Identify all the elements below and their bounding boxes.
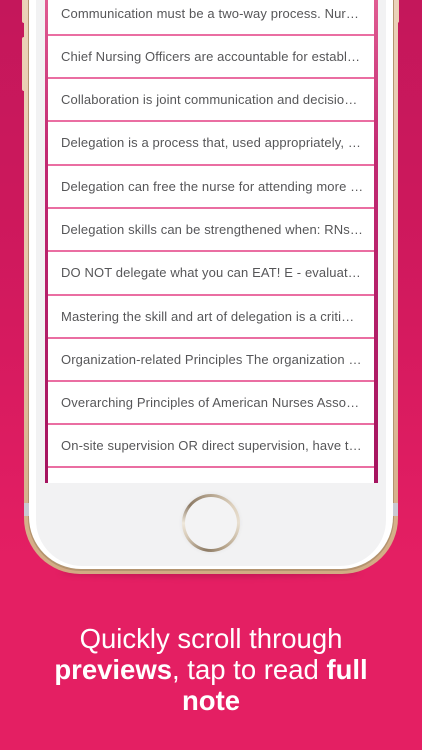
note row xyxy=(48,166,374,209)
home button face xyxy=(185,497,237,549)
home button xyxy=(182,494,240,552)
note row xyxy=(48,339,374,382)
screen xyxy=(45,0,378,483)
note row: Delegation can free the nurse for attending more … xyxy=(61,179,363,194)
note row: DO NOT delegate what you can EAT! E - evaluat… xyxy=(61,265,361,280)
phone shadow xyxy=(60,568,360,577)
note row: Delegation is a process that, used appropriately, … xyxy=(61,135,361,150)
note row xyxy=(48,252,374,296)
note list xyxy=(48,0,374,483)
note row xyxy=(48,36,374,79)
note row xyxy=(48,425,374,468)
note row xyxy=(48,0,374,36)
antenna band right xyxy=(393,503,398,516)
phone grey face xyxy=(36,0,386,566)
note row: Mastering the skill and art of delegation is a criti… xyxy=(61,309,354,324)
note row xyxy=(48,79,374,122)
note row xyxy=(48,122,374,166)
antenna band left xyxy=(24,503,29,516)
note row: On-site supervision OR direct supervision, have t… xyxy=(61,438,362,453)
note row: Organization-related Principles The organization … xyxy=(61,352,362,367)
phone inner dark line xyxy=(28,0,394,571)
note row: Collaboration is joint communication and decisio… xyxy=(61,92,357,107)
left side button lower xyxy=(22,37,27,91)
left side button upper xyxy=(22,0,27,23)
caption: Quickly scroll through previews, tap to read full note xyxy=(54,623,368,716)
note row xyxy=(48,382,374,425)
phone white body xyxy=(29,0,393,569)
note row: Communication must be a two-way process. Nur… xyxy=(61,6,359,21)
phone gold frame xyxy=(24,0,398,574)
note row: Overarching Principles of American Nurses Asso… xyxy=(61,395,359,410)
note row xyxy=(48,296,374,339)
right side button xyxy=(394,0,399,23)
note row: Chief Nursing Officers are accountable for establ… xyxy=(61,49,360,64)
note row: Delegation skills can be strengthened when: RNs… xyxy=(61,222,363,237)
empty row xyxy=(48,468,374,483)
phone xyxy=(22,0,399,579)
note row xyxy=(48,209,374,252)
